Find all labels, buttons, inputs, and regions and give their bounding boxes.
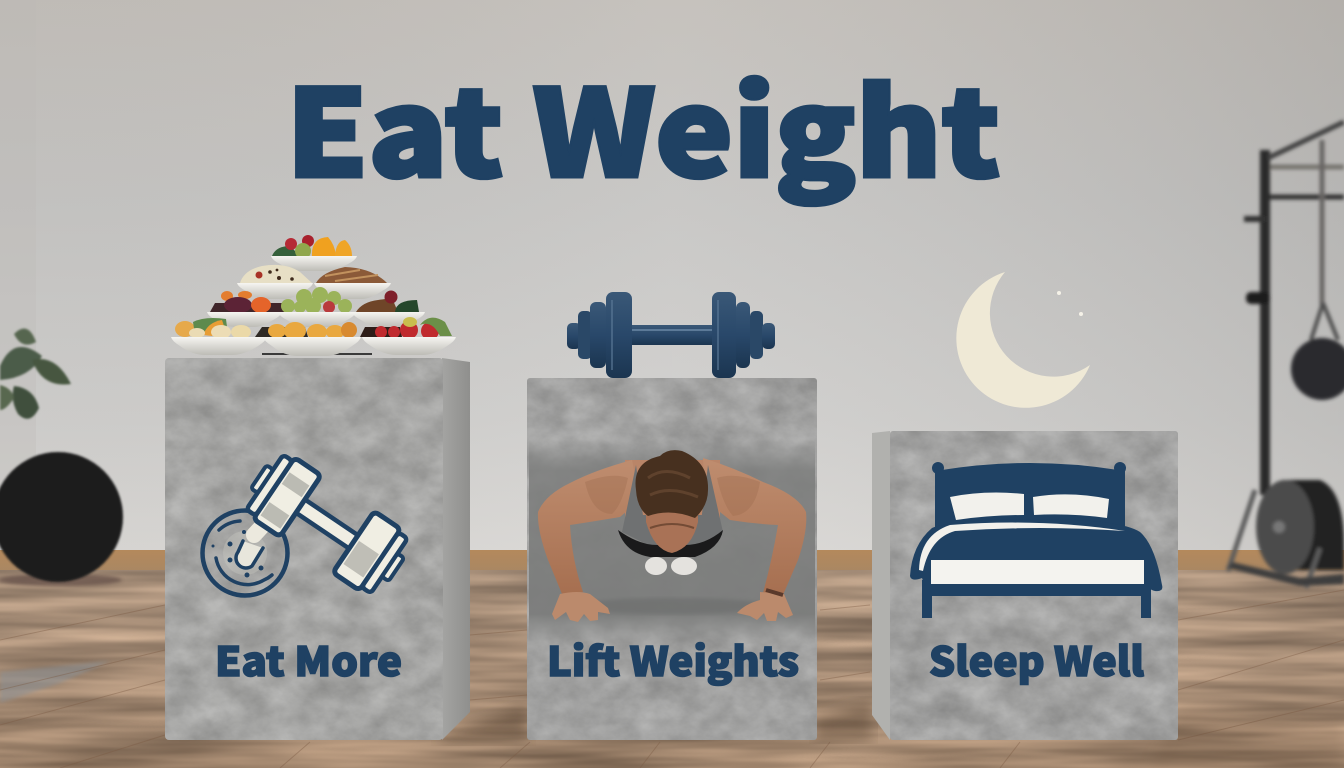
dark gap under plates — [262, 353, 372, 355]
feet — [645, 557, 697, 575]
hands — [552, 592, 793, 622]
icon: dumbbell on block — [567, 292, 775, 378]
panel: Sleep Well block — [872, 431, 1178, 740]
block 1 concrete texture — [165, 358, 443, 740]
panel: Lift Weights block — [527, 378, 817, 740]
block 1 front face — [165, 358, 443, 740]
gym mat shading — [529, 440, 815, 645]
third tier food — [240, 265, 387, 283]
photo: man doing push-up — [538, 450, 806, 622]
hair — [636, 450, 708, 518]
wooden floor — [0, 570, 1344, 768]
exercise ball — [0, 452, 123, 586]
illustration: pyramid of food plates — [171, 235, 456, 356]
third tier plates — [237, 283, 391, 299]
block 2 concrete texture — [527, 378, 817, 740]
block 1 side face — [442, 358, 470, 740]
baseboard — [0, 550, 1344, 572]
title: Eat Weight — [286, 38, 1000, 212]
block 3 concrete texture — [890, 431, 1178, 740]
icon: bed — [910, 462, 1162, 618]
wrist band — [766, 590, 783, 595]
potted plant leaves — [0, 329, 71, 419]
block 2 front face — [527, 378, 817, 740]
label: Eat More: Eat More — [215, 630, 402, 688]
bottom tier plates — [171, 337, 456, 356]
tank top — [622, 465, 723, 546]
label: Lift Weights: Lift Weights — [547, 630, 799, 688]
top tier food — [272, 235, 352, 259]
label: Sleep Well: Sleep Well — [929, 630, 1144, 688]
bottom tier food — [175, 317, 452, 340]
top plate — [271, 256, 357, 271]
icon: dumbbell and plate — [202, 447, 417, 601]
second tier plates — [207, 312, 425, 327]
panel: Eat More block — [165, 358, 470, 740]
block 3 side face — [872, 431, 890, 740]
face — [646, 510, 698, 553]
arms — [538, 458, 806, 595]
icon: crescent moon with stars — [956, 272, 1090, 408]
second tier food — [210, 287, 419, 314]
wall background — [0, 0, 1344, 560]
torso — [625, 460, 720, 530]
gym rack and equipment — [1228, 122, 1344, 588]
block 3 front face — [890, 431, 1178, 740]
